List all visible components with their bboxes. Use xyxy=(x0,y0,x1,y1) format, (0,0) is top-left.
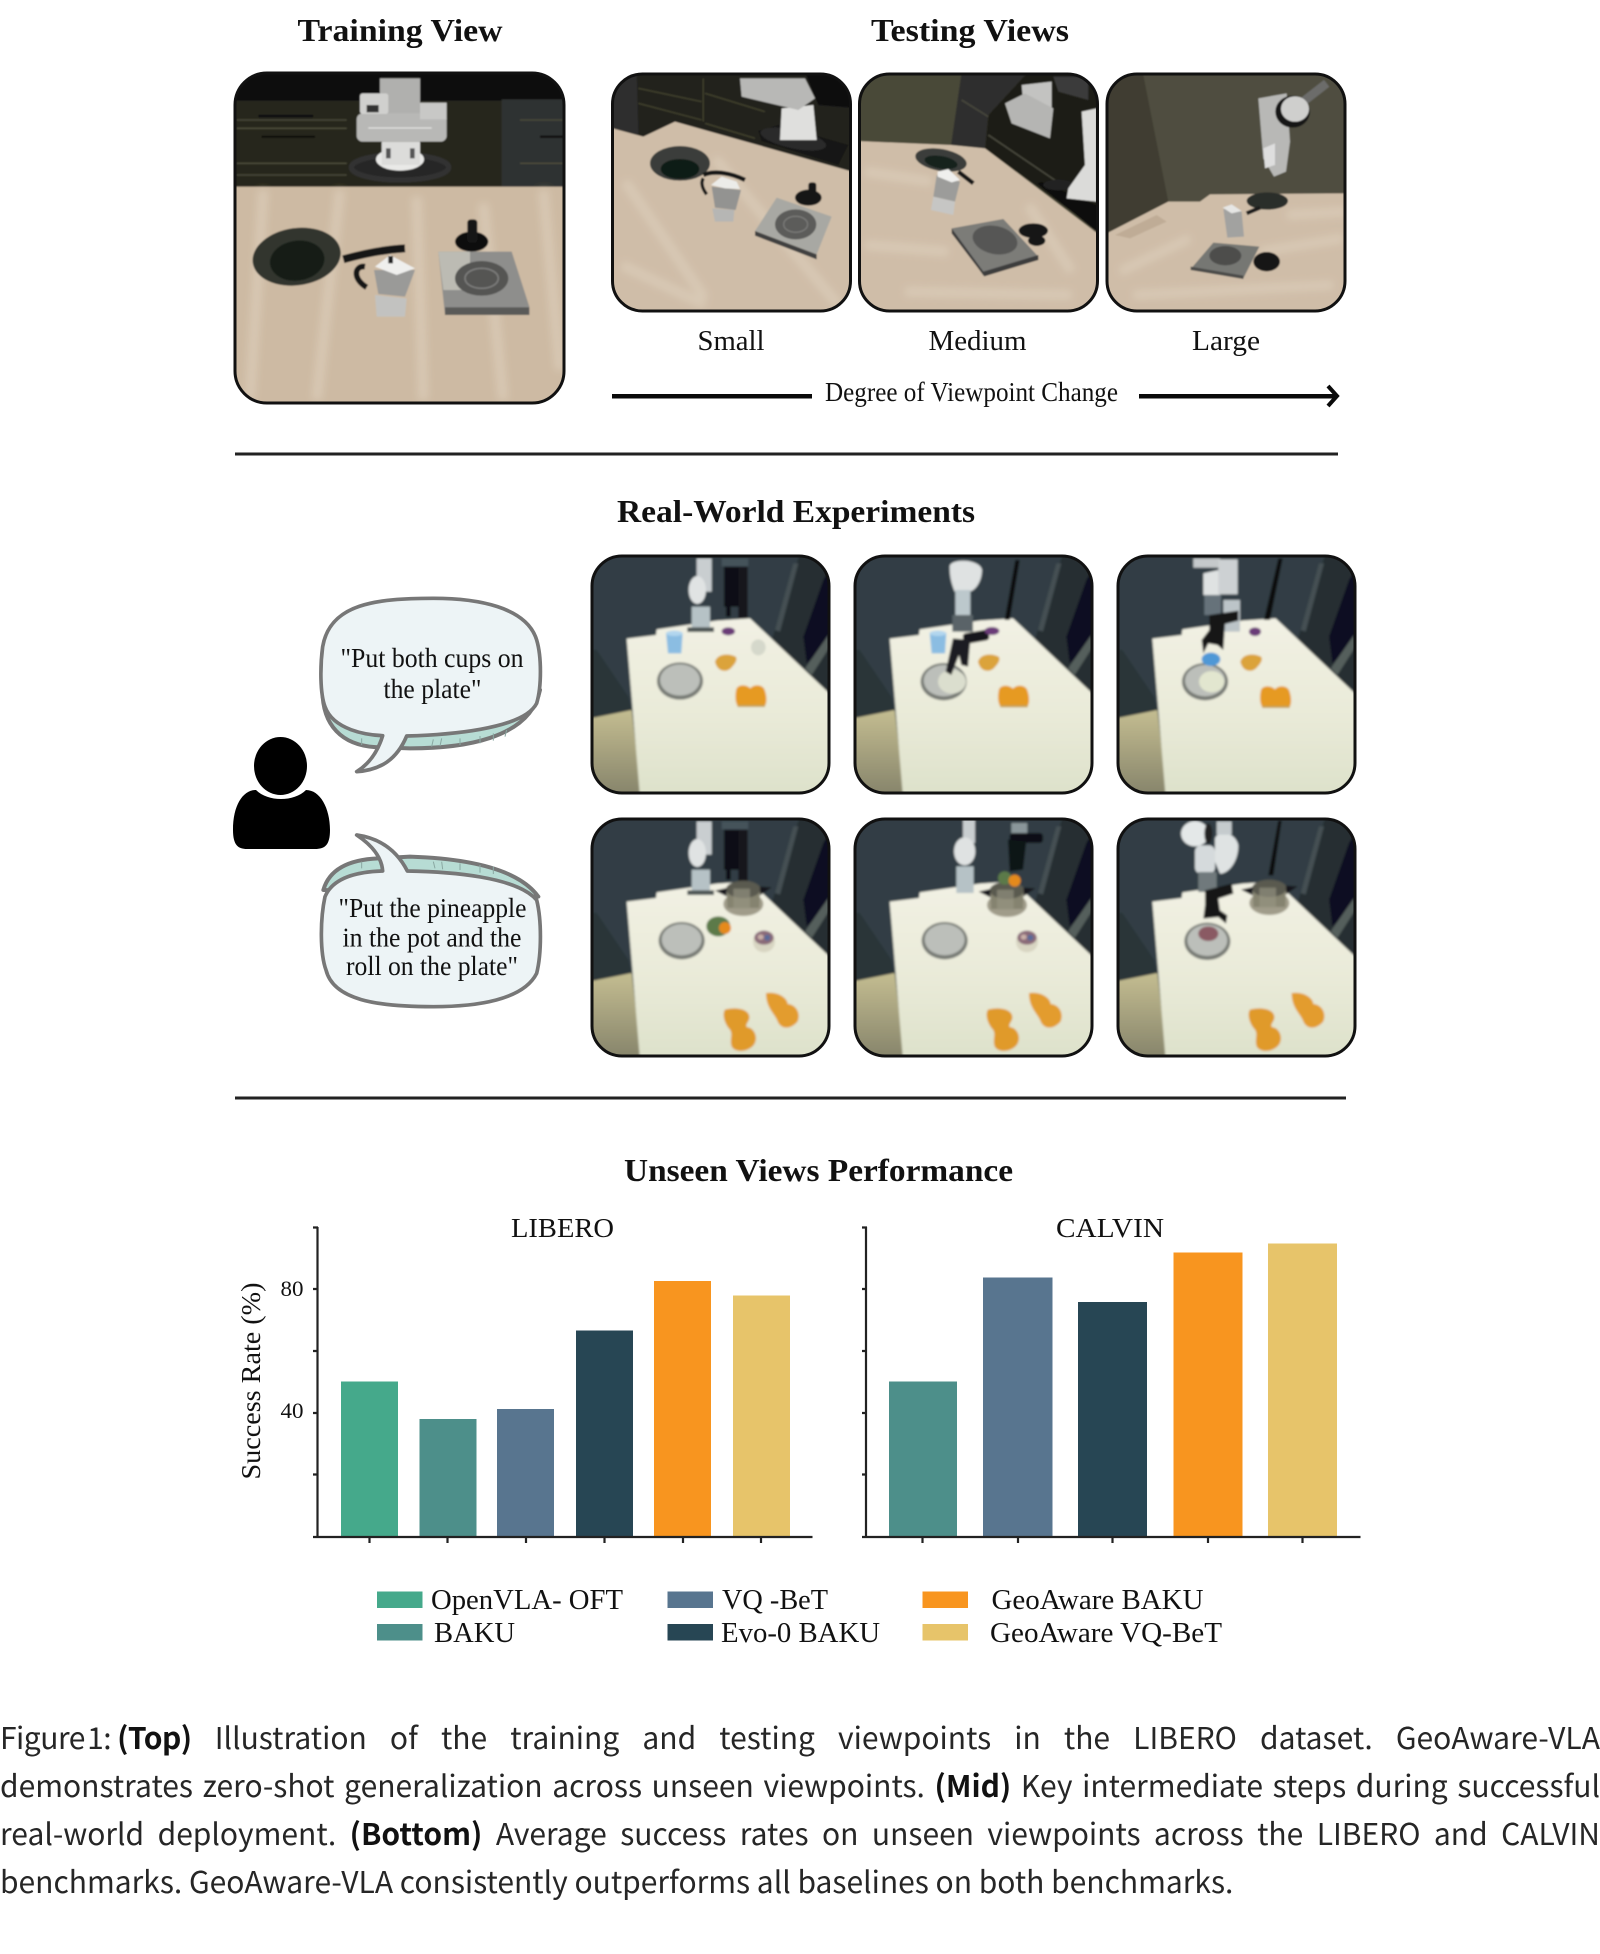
speech bubble: put both cups: the plate" xyxy=(384,674,482,704)
caption: Figure 1: xyxy=(0,1714,111,1758)
photo: experiment row 1 step 1 xyxy=(590,550,833,797)
speech bubble: put both cups: "Put both cups on xyxy=(340,643,524,673)
speech bubble: put the pineapple xyxy=(321,835,540,1007)
legend: GeoAware BAKU xyxy=(992,1585,1204,1616)
axes xyxy=(862,1227,1360,1543)
caption: real-world deployment. (Bottom) Average success rates on unseen viewpoints across the LIBERO and CALVIN xyxy=(0,1810,1600,1854)
chart title: CALVIN xyxy=(1056,1213,1164,1243)
y tick labels: 80 xyxy=(280,1276,304,1301)
caption: Illustration of the training and testing viewpoints in the LIBERO dataset. GeoAware-VLA xyxy=(215,1714,1600,1758)
bars xyxy=(341,1281,790,1537)
photo: experiment row 2 step 2 xyxy=(853,813,1096,1060)
panel: testing view large xyxy=(1100,65,1353,318)
caption: demonstrates zero-shot generalization across unseen viewpoints. (Mid) Key intermediate steps during successful xyxy=(0,1762,1600,1806)
label: Medium: Medium xyxy=(928,326,1027,357)
speech bubble: put the pineapple: roll on the plate" xyxy=(346,951,518,981)
heading: Training View: Training View xyxy=(298,12,502,48)
arrow: degree of viewpoint change xyxy=(612,377,1337,407)
arrow: degree of viewpoint change: Degree of Viewpoint Change xyxy=(825,377,1118,407)
panel: testing view medium xyxy=(855,65,1108,318)
bar chart: CALVIN xyxy=(862,1213,1360,1543)
legend: BAKU xyxy=(434,1618,515,1649)
bars xyxy=(889,1244,1337,1537)
heading: Real-World Experiments: Real-World Experiments xyxy=(617,493,975,529)
caption: benchmarks. GeoAware-VLA consistently outperforms all baselines on both benchmarks. xyxy=(0,1858,1233,1902)
legend xyxy=(377,1585,1222,1649)
speech bubble: put the pineapple: in the pot and the xyxy=(342,922,522,952)
caption xyxy=(0,1714,1600,1902)
chart title: LIBERO xyxy=(511,1213,614,1243)
legend: Evo-0 BAKU xyxy=(721,1618,880,1649)
photo: experiment row 1 step 3 xyxy=(1116,550,1359,797)
y tick labels: 40 xyxy=(280,1398,304,1423)
photo: experiment row 2 step 3 xyxy=(1116,813,1359,1060)
photo: experiment row 1 step 2 xyxy=(853,550,1096,797)
y tick labels xyxy=(280,1276,304,1423)
y axis title: Success Rate (%) xyxy=(236,1282,266,1480)
label: Large: Large xyxy=(1192,326,1260,357)
legend: OpenVLA- OFT xyxy=(431,1585,623,1616)
axes xyxy=(313,1227,812,1543)
speech bubble: put the pineapple: "Put the pineapple xyxy=(338,893,527,923)
bar chart: LIBERO xyxy=(236,1213,812,1543)
icon: person xyxy=(233,737,330,849)
speech bubble: put both cups xyxy=(321,598,540,772)
heading: Testing Views: Testing Views xyxy=(871,12,1069,48)
photo: experiment row 2 step 1 xyxy=(590,813,833,1060)
caption: (Top) xyxy=(117,1714,192,1758)
panel: training view simulation xyxy=(230,70,570,407)
heading: Unseen Views Performance: Unseen Views Performance xyxy=(624,1152,1013,1188)
legend: VQ -BeT xyxy=(722,1585,828,1616)
panel: testing view small xyxy=(605,65,858,318)
legend: GeoAware VQ-BeT xyxy=(990,1618,1222,1649)
label: Small: Small xyxy=(698,326,765,357)
